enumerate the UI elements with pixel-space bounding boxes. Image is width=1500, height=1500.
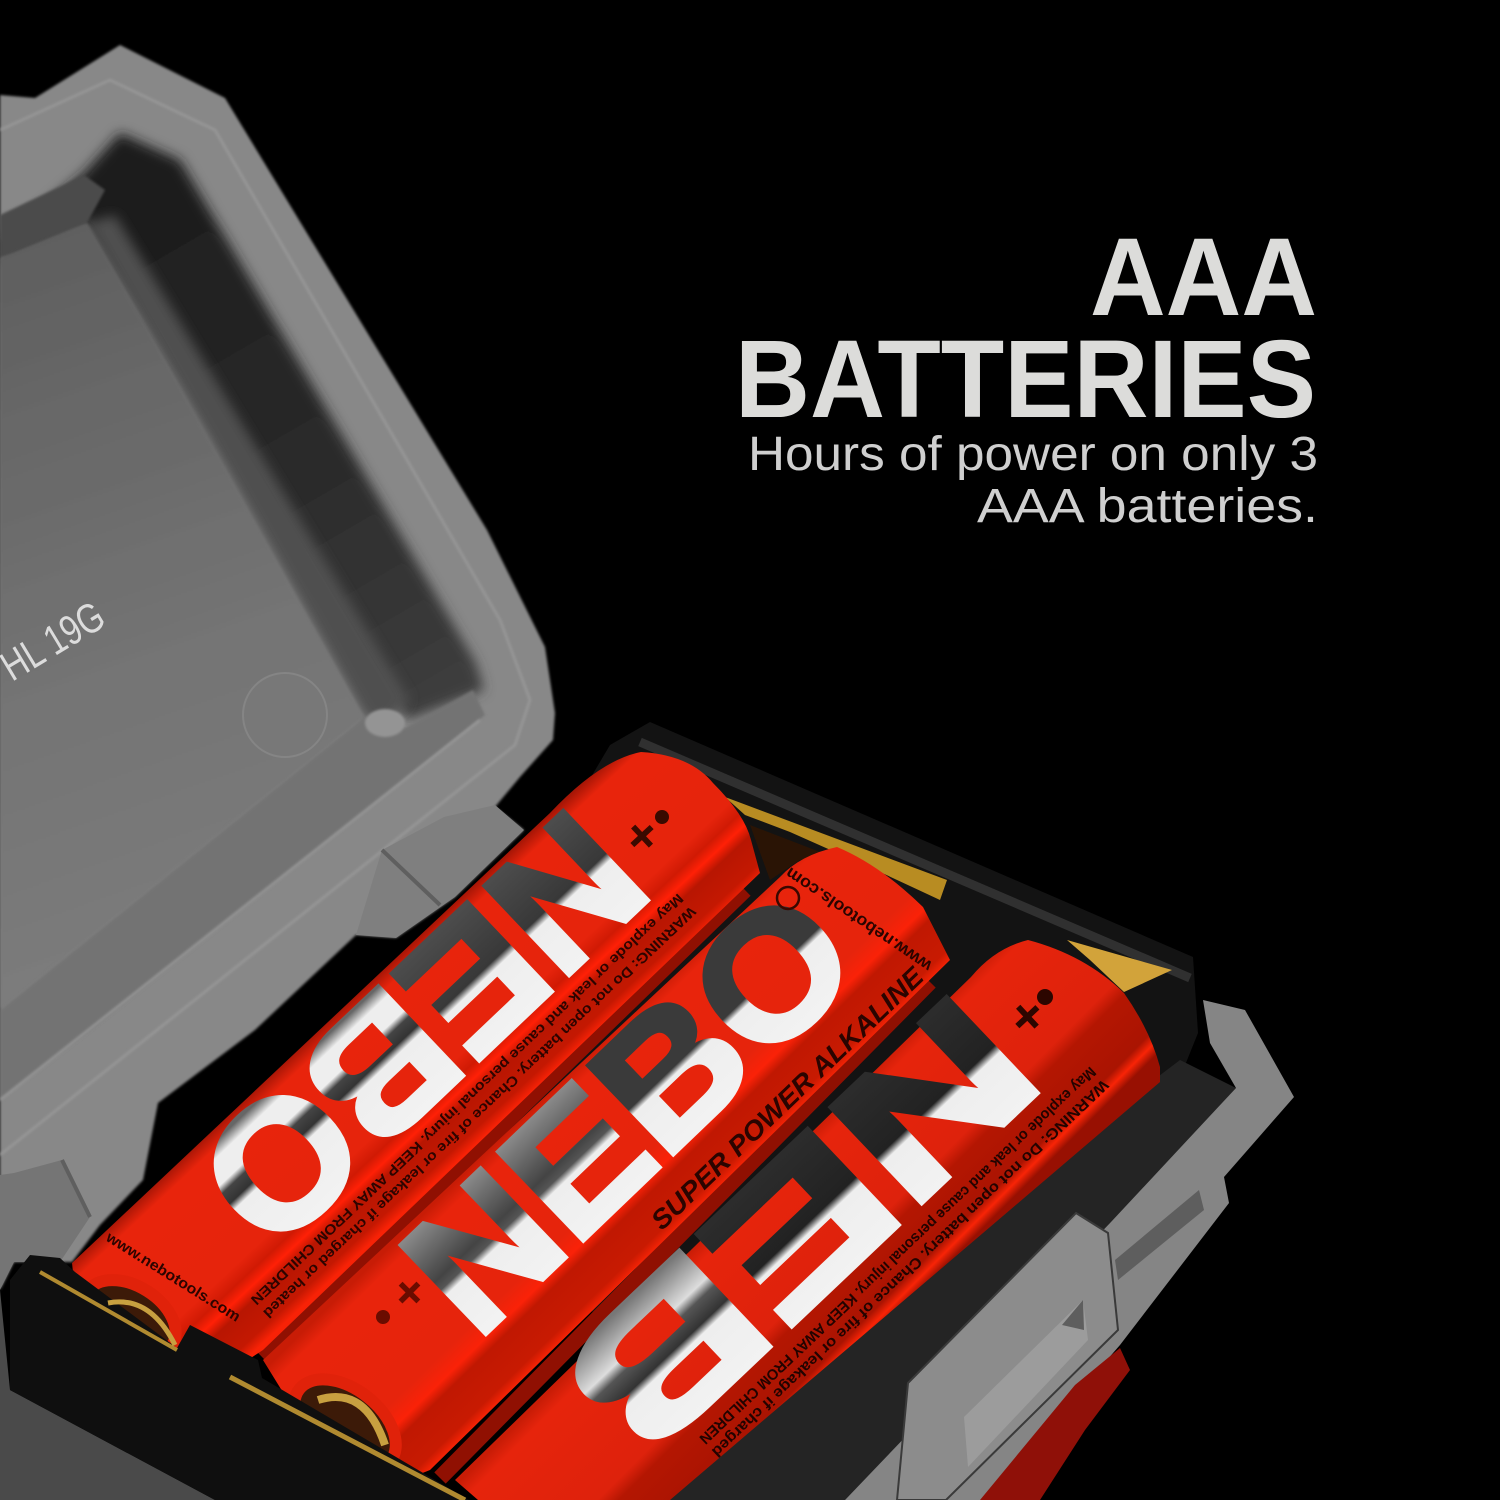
battery 2 product name: SUPER POWER ALKALINE: [645, 961, 930, 1236]
battery 1 warning line 2: WARNING: Do not open battery. Chance of fire or leakage if charged or heated: [260, 904, 699, 1321]
battery 1 polarity: +: [610, 805, 673, 867]
lid floor: [0, 223, 364, 1010]
battery 3 warning line 2: WARNING: Do not open battery. Chance of fire or leakage if charged: [708, 1076, 1112, 1460]
battery 3 polarity: +: [995, 985, 1060, 1049]
lid ridges: [0, 80, 530, 1155]
battery 3 dot: [1037, 989, 1053, 1005]
battery 1 dot: [655, 810, 669, 824]
battery 2 website: www.nebotools.com: [782, 864, 936, 976]
subtitle line 1: Hours of power on only 3: [748, 428, 1318, 481]
battery 1 warning: May explode or leak and cause personal injury. KEEP AWAY FROM CHILDREN: [248, 891, 687, 1308]
latch recess: [964, 1300, 1088, 1467]
battery 2 brand: NEBO: [366, 852, 893, 1369]
battery 1: [71, 752, 760, 1372]
battery 1 website: www.nebotools.com: [102, 1228, 243, 1326]
hinge: [0, 805, 524, 1290]
lid inner wall: [0, 133, 484, 720]
case base rim: [600, 1000, 1294, 1500]
gold contact right: [1067, 940, 1172, 992]
battery 2 dot: [376, 1310, 390, 1324]
case lid: [0, 45, 555, 1290]
title line 1: AAA: [1090, 216, 1317, 339]
gold contact upper: [725, 797, 947, 900]
latch: [897, 1213, 1130, 1500]
gold terminal left: [40, 1272, 177, 1350]
lid ejector mark: [243, 673, 327, 757]
battery 2 end cap: [277, 1361, 413, 1489]
battery 2 polarity: +: [380, 1262, 440, 1322]
battery 1 brand: NEBO: [161, 776, 683, 1285]
case base rear: [0, 1290, 215, 1500]
battery 2 seal icon: [777, 887, 799, 909]
battery 3: [455, 929, 1160, 1500]
lid sloped wall: [87, 215, 410, 725]
battery holder: [400, 722, 1198, 1320]
battery seams: [263, 890, 930, 1478]
subtitle line 2: AAA batteries.: [977, 480, 1318, 533]
battery 2: [263, 827, 950, 1489]
lid corner highlight: [365, 709, 405, 737]
title line 2: BATTERIES: [735, 318, 1316, 441]
battery 1 end cap: [71, 1264, 189, 1372]
battery 3 brand: NEB: [524, 957, 1076, 1496]
gold terminal centre: [230, 1377, 465, 1500]
battery 3 warning: May explode or leak and cause personal injury. KEEP AWAY FROM CHILDREN: [696, 1063, 1099, 1447]
holder front wall: [10, 1255, 469, 1500]
red tab: [980, 1348, 1130, 1500]
